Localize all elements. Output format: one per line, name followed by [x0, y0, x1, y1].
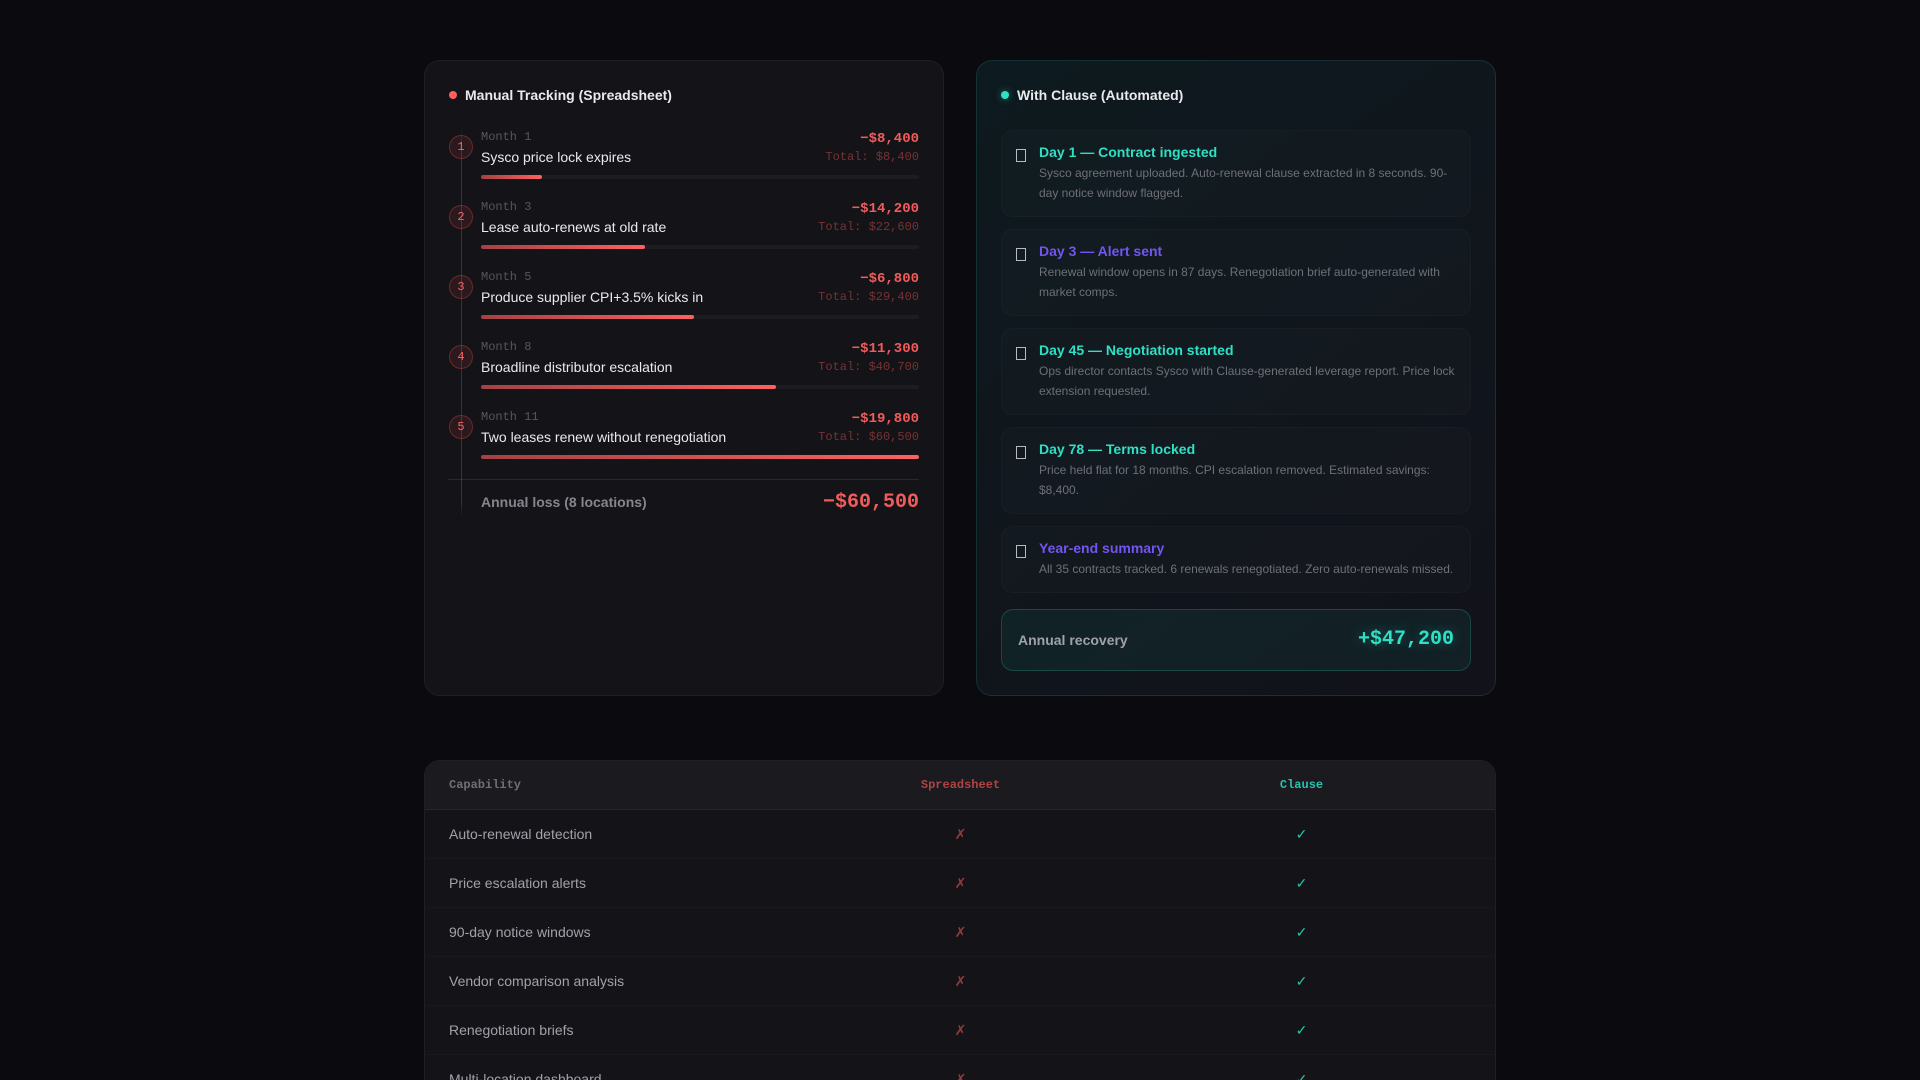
event card: day 45: [1001, 328, 1471, 415]
table row: renegotiation briefs: ✓: [1296, 1022, 1307, 1038]
table row: 90-day notice windows: ✓: [1296, 924, 1307, 940]
timeline item: month 1: −$8,400: [860, 131, 919, 147]
table row: price escalation alerts: Price escalation alerts: [449, 875, 586, 891]
timeline item: month 3: Month 3: [481, 200, 531, 214]
table row: vendor comparison analysis: [425, 957, 1495, 1006]
timeline item: month 8: Total: $40,700: [818, 360, 919, 374]
timeline item: month 3: 2: [457, 210, 465, 224]
table row: price escalation alerts: ✗: [955, 875, 966, 891]
timeline item: month 5: −$6,800: [860, 271, 919, 287]
event card: day 78: Day 78 — Terms locked: [1039, 441, 1195, 457]
event card: day 78: [1001, 427, 1471, 514]
table row: 90-day notice windows: [425, 908, 1495, 957]
timeline item: month 8: [449, 340, 919, 389]
timeline item: month 5: [449, 270, 919, 319]
table row: renegotiation briefs: ✗: [955, 1022, 966, 1038]
panel: with clause: [976, 60, 1496, 696]
event card: day 78: $8,400.: [1039, 483, 1079, 497]
table row: auto-renewal detection: Auto-renewal detection: [449, 826, 592, 842]
timeline item: month 8: −$11,300: [852, 341, 919, 357]
table header: [425, 761, 1495, 810]
table row: vendor comparison analysis: ✓: [1296, 973, 1307, 989]
table header: Clause: [1280, 778, 1323, 792]
timeline item: month 8: Month 8: [481, 340, 531, 354]
timeline item: month 11: Two leases renew without renegotiation: [481, 429, 726, 445]
table row: price escalation alerts: [425, 859, 1495, 908]
table row: auto-renewal detection: [425, 810, 1495, 859]
event card: year-end summary: All 35 contracts tracked. 6 renewals renegotiated. Zero auto-renewals missed.: [1039, 562, 1453, 576]
timeline item: month 5: Produce supplier CPI+3.5% kicks in: [481, 289, 703, 305]
event card: day 3: Day 3 — Alert sent: [1039, 243, 1162, 259]
event card: day 1: Sysco agreement uploaded. Auto-renewal clause extracted in 8 seconds. 90-: [1039, 166, 1447, 180]
panel heading: manual tracking: Manual Tracking (Spreadsheet): [465, 87, 672, 103]
recovery label: Annual recovery: [1018, 632, 1128, 648]
timeline item: month 1: Sysco price lock expires: [481, 149, 631, 165]
event card: day 1: [1001, 130, 1471, 217]
timeline connector line: [461, 128, 462, 517]
event card: day 78: Price held flat for 18 months. CPI escalation removed. Estimated savings:: [1039, 463, 1430, 477]
timeline item: month 3: −$14,200: [852, 201, 919, 217]
timeline item: month 11: [449, 410, 919, 459]
event card: year-end summary: [1001, 526, 1471, 593]
timeline item: month 3: Lease auto-renews at old rate: [481, 219, 666, 235]
table row: price escalation alerts: ✓: [1296, 875, 1307, 891]
timeline item: month 5: Total: $29,400: [818, 290, 919, 304]
event card: day 1: day notice window flagged.: [1039, 186, 1183, 200]
table row: vendor comparison analysis: ✗: [955, 973, 966, 989]
timeline item: month 3: [449, 200, 919, 249]
table header: Spreadsheet: [921, 778, 1000, 792]
event card: day 3: [1001, 229, 1471, 316]
table header: Capability: [449, 778, 521, 792]
event card: day 3: Renewal window opens in 87 days. Renegotiation brief auto-generated with: [1039, 265, 1440, 279]
panel heading: with clause: With Clause (Automated): [1017, 87, 1183, 103]
panel: capability comparison table: [424, 760, 1496, 1080]
status dot: teal: [1001, 91, 1009, 99]
annual loss value: −$60,500: [823, 491, 919, 514]
timeline item: month 3: Total: $22,600: [818, 220, 919, 234]
timeline item: month 8: Broadline distributor escalation: [481, 359, 672, 375]
timeline item: month 1: [449, 130, 919, 179]
event card: day 45: Ops director contacts Sysco with Clause-generated leverage report. Price lock: [1039, 364, 1455, 378]
table row: auto-renewal detection: ✓: [1296, 826, 1307, 842]
timeline item: month 1: Total: $8,400: [825, 150, 919, 164]
table row: renegotiation briefs: Renegotiation briefs: [449, 1022, 574, 1038]
timeline item: month 11: −$19,800: [852, 411, 919, 427]
table row: 90-day notice windows: 90-day notice windows: [449, 924, 591, 940]
event card: year-end summary: Year-end summary: [1039, 540, 1164, 556]
timeline item: month 11: Month 11: [481, 410, 539, 424]
timeline item: month 5: Month 5: [481, 270, 531, 284]
panel: manual tracking: [424, 60, 944, 696]
annual loss label: Annual loss (8 locations): [481, 494, 647, 510]
event card: day 3: market comps.: [1039, 285, 1118, 299]
recovery value: +$47,200: [1358, 628, 1454, 651]
timeline item: month 11: Total: $60,500: [818, 430, 919, 444]
timeline item: month 11: 5: [457, 420, 465, 434]
callout: annual recovery: [1001, 609, 1471, 671]
timeline item: month 1: 1: [457, 140, 465, 154]
table row: 90-day notice windows: ✗: [955, 924, 966, 940]
table row: renegotiation briefs: [425, 1006, 1495, 1055]
timeline item: month 8: 4: [457, 350, 465, 364]
table row: vendor comparison analysis: Vendor comparison analysis: [449, 973, 624, 989]
table row: multi-location dashboard: [449, 1071, 1307, 1080]
event card: day 45: extension requested.: [1039, 384, 1150, 398]
timeline item: month 5: 3: [457, 280, 465, 294]
event card: day 45: Day 45 — Negotiation started: [1039, 342, 1234, 358]
timeline item: month 1: Month 1: [481, 130, 531, 144]
status dot: red: [449, 91, 457, 99]
event card: day 1: Day 1 — Contract ingested: [1039, 144, 1217, 160]
table row: auto-renewal detection: ✗: [955, 826, 966, 842]
